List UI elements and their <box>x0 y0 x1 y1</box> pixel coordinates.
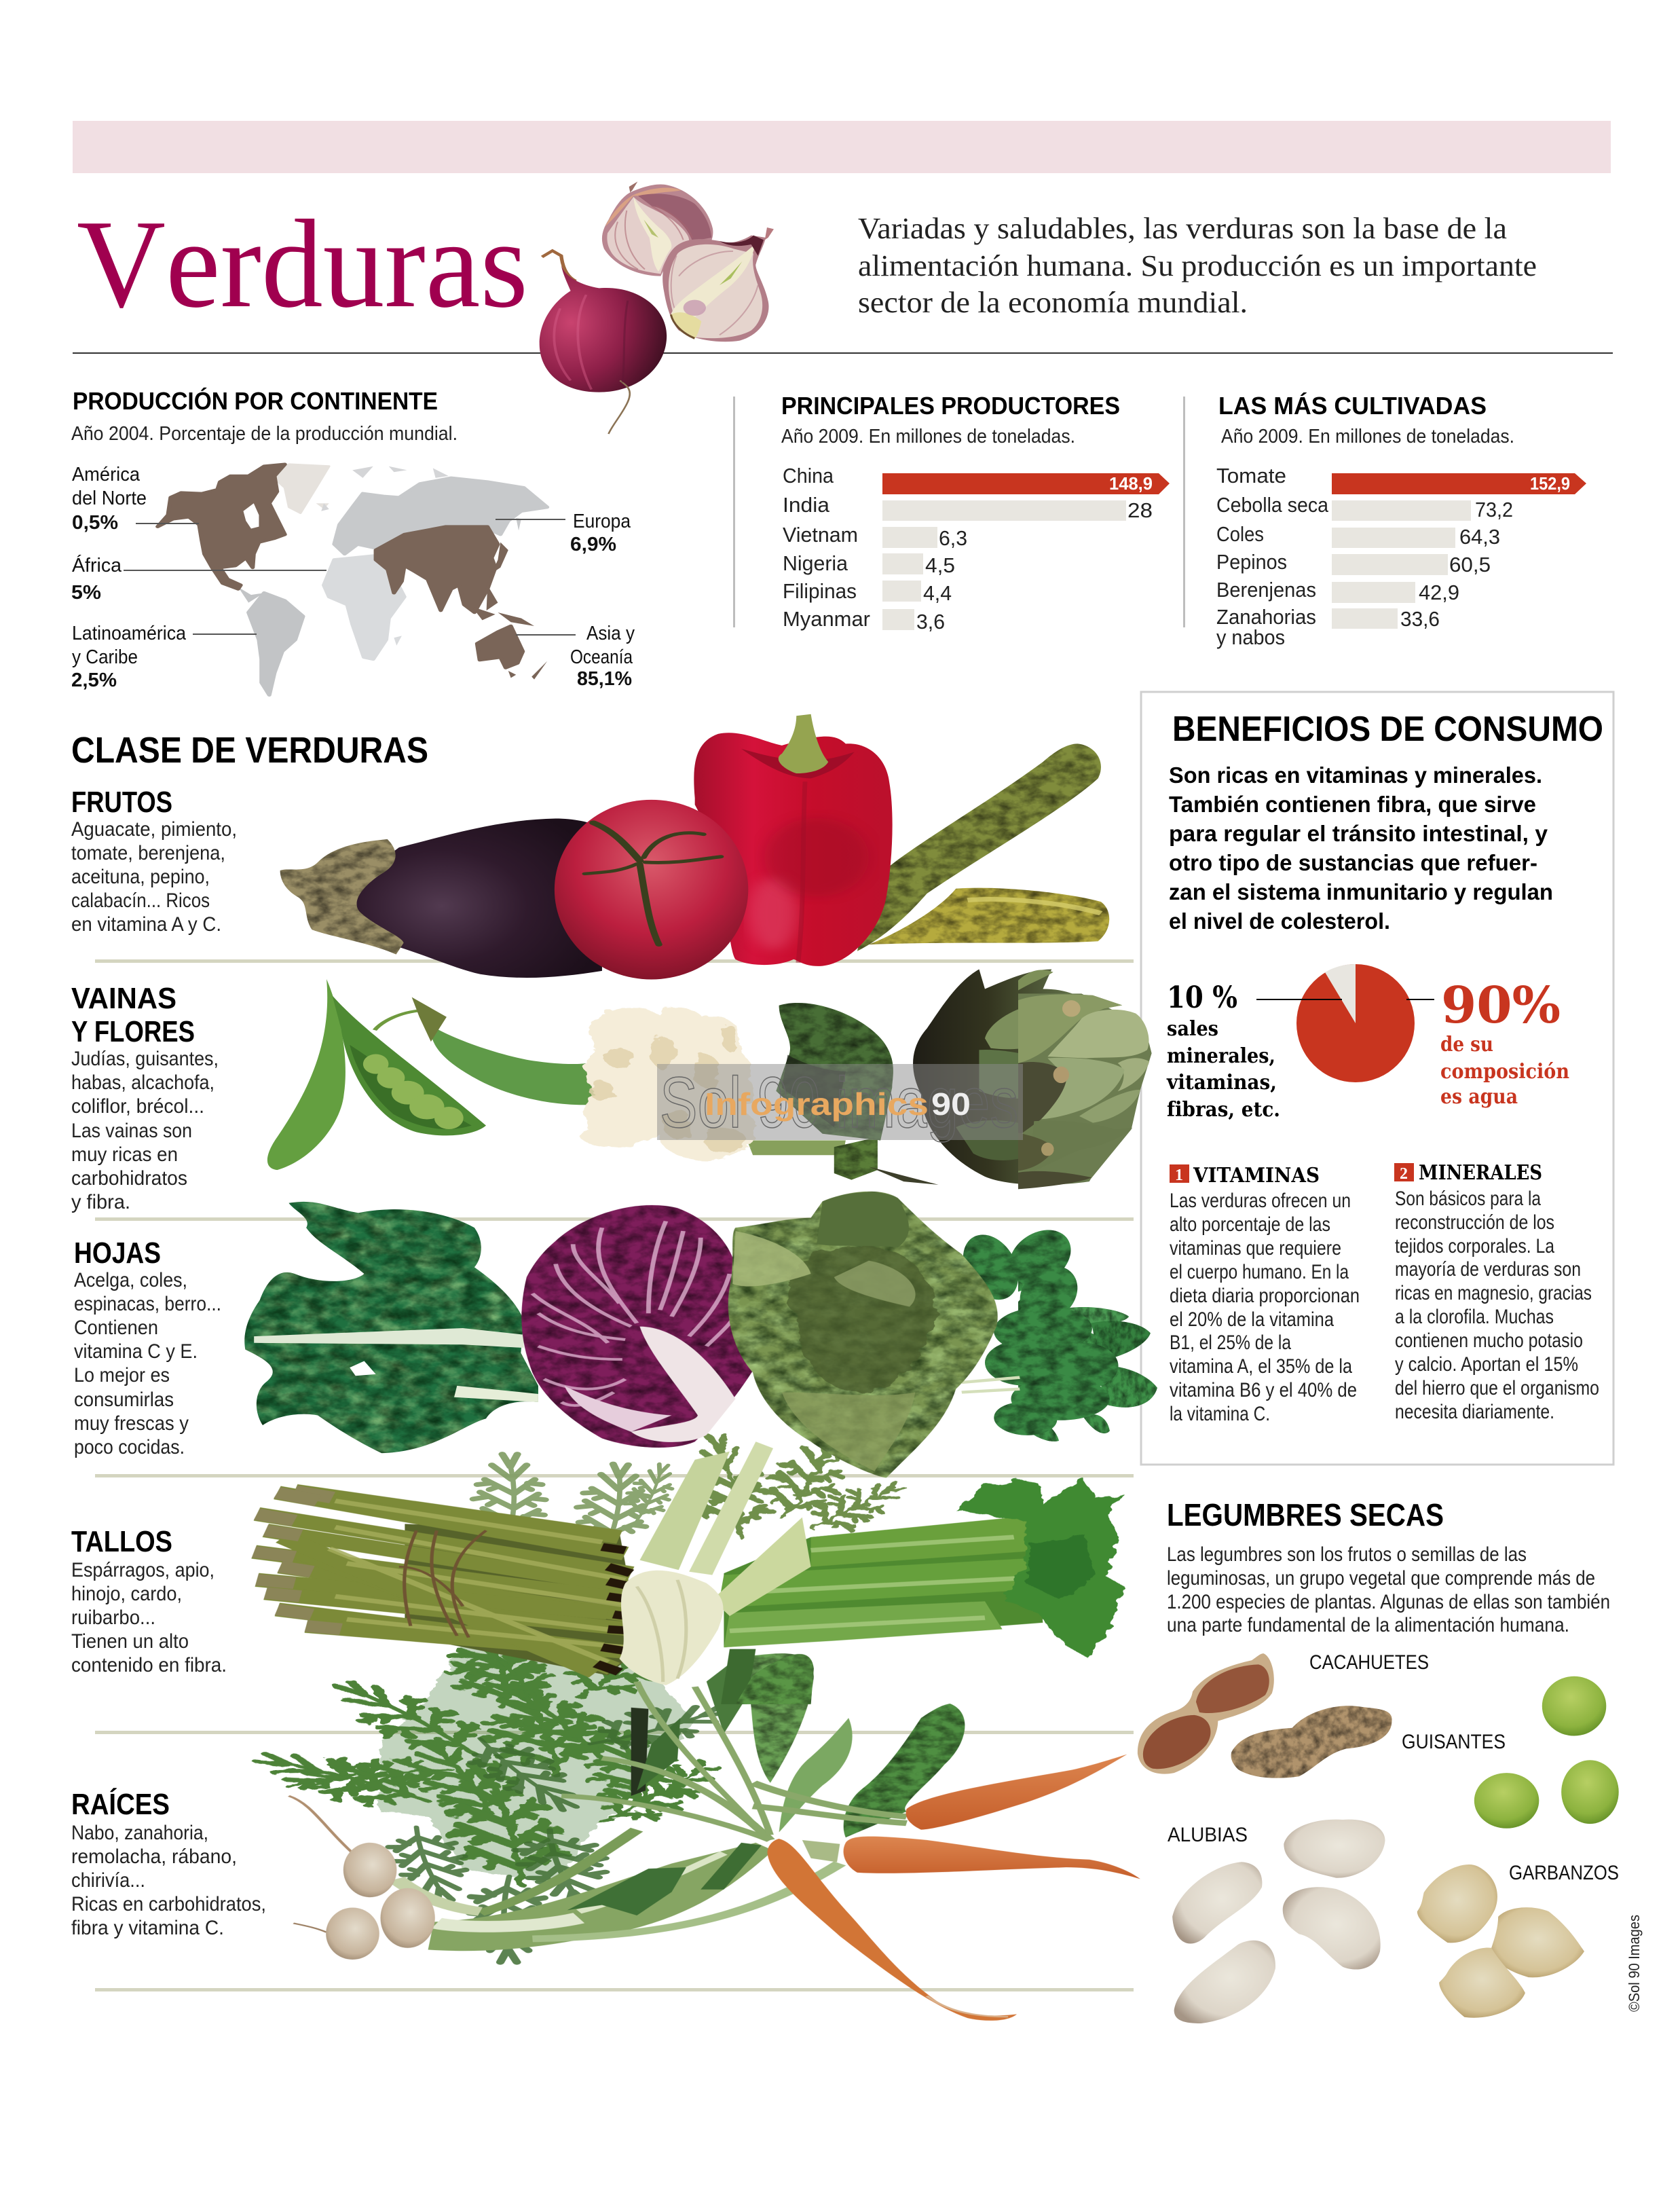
map labels: 2,5% <box>71 669 117 691</box>
text block: raíces: remolacha, rábano, <box>71 1845 237 1868</box>
text block: minerales: tejidos corporales. La <box>1395 1235 1554 1257</box>
map labels: África <box>72 554 122 576</box>
bar chart: 64,3 <box>1459 525 1500 549</box>
panel: producción por continente <box>71 386 635 695</box>
bar chart: Zanahorias <box>1216 605 1316 629</box>
intro text: alimentación humana. Su producción es un importante <box>858 249 1537 282</box>
map labels: Oceanía <box>570 646 633 668</box>
illustration: frutos (eggplant, tomato, pepper, cucumbers) <box>280 714 1109 979</box>
text block: frutos: calabacín... Ricos <box>71 889 210 912</box>
bar chart: Coles <box>1216 522 1264 546</box>
text block: raíces <box>71 1787 266 1939</box>
illustration: raíces (greens, carrots, turnips) <box>241 1620 1140 2021</box>
bar chart: 3,6 <box>916 610 945 633</box>
text block: raíces: fibra y vitamina C. <box>71 1917 224 1939</box>
map labels: y Caribe <box>72 646 138 668</box>
intro text: para regular el tránsito intestinal, y <box>1169 821 1548 846</box>
bar chart: Nigeria <box>783 551 848 575</box>
text block: vainas y flores <box>71 982 219 1213</box>
text block: raíces: RAÍCES <box>71 1787 170 1821</box>
callout: 10 %: fibras, etc. <box>1167 1098 1280 1122</box>
intro text <box>1169 763 1553 934</box>
panel: las más cultivadas <box>1216 392 1586 649</box>
map labels: Asia y <box>586 623 635 644</box>
text block: tallos: contenido en fibra. <box>71 1654 227 1676</box>
bar chart: Filipinas <box>783 579 857 603</box>
intro text: el nivel de colesterol. <box>1169 908 1390 934</box>
text block: Las legumbres son los frutos o semillas de las <box>1167 1543 1527 1566</box>
text block: vainas y flores: Y FLORES <box>71 1015 195 1048</box>
text block: frutos: aceituna, pepino, <box>71 866 210 888</box>
text block: vitaminas: vitaminas que requiere <box>1170 1237 1341 1260</box>
legume labels: GARBANZOS <box>1509 1862 1619 1884</box>
intro text: También contienen fibra, que sirve <box>1169 792 1536 817</box>
text block: vitaminas: dieta diaria proporcionan <box>1170 1285 1360 1307</box>
bar chart: India <box>783 493 830 517</box>
callout: 90%: composición <box>1440 1060 1569 1084</box>
text block: minerales: necesita diariamente. <box>1395 1401 1554 1423</box>
map labels: 0,5% <box>72 512 118 534</box>
illustration: tallos (carrot tops, asparagus, celery, fennel) <box>254 1434 1124 1704</box>
intro text: otro tipo de sustancias que refuer- <box>1169 850 1537 875</box>
text block: hojas: poco cocidas. <box>74 1436 185 1458</box>
panel: beneficios de consumo <box>1166 710 1603 1425</box>
text block: minerales: del hierro que el organismo <box>1395 1377 1599 1399</box>
heading: PRINCIPALES PRODUCTORES <box>781 392 1120 420</box>
callout: 10 % <box>1166 980 1280 1122</box>
illustration: legumes <box>1138 1653 1619 2023</box>
text block: hojas: Lo mejor es <box>74 1364 170 1386</box>
bar chart: 60,5 <box>1449 553 1491 576</box>
bar chart: 152,9 <box>1530 473 1570 494</box>
subheading: Año 2004. Porcentaje de la producción mundial. <box>71 423 458 445</box>
text block: vainas y flores: coliflor, brécol... <box>71 1095 204 1118</box>
intro text: Variadas y saludables, las verduras son la base de la <box>858 212 1507 245</box>
bar chart: Pepinos <box>1216 550 1287 574</box>
text block: minerales: Son básicos para la <box>1395 1188 1541 1210</box>
text block <box>1167 1543 1610 1636</box>
text block: frutos: en vitamina A y C. <box>71 913 221 936</box>
legume labels <box>1168 1651 1619 1884</box>
bar chart: 28 <box>1127 498 1153 522</box>
world map <box>157 464 547 695</box>
callout: 10 %: vitaminas, <box>1166 1071 1277 1095</box>
bar chart <box>783 464 1170 633</box>
map labels <box>71 464 635 691</box>
text block: vainas y flores: VAINAS <box>71 982 176 1015</box>
text block: hojas: HOJAS <box>74 1236 161 1270</box>
bar chart: 33,6 <box>1400 607 1440 631</box>
text block: frutos: FRUTOS <box>71 786 172 819</box>
map labels: 6,9% <box>570 534 616 555</box>
map labels: 5% <box>71 582 101 604</box>
text block: frutos: tomate, berenjena, <box>71 842 225 864</box>
text block: vitaminas: vitamina B6 y el 40% de <box>1170 1379 1357 1401</box>
bar chart: Tomate <box>1216 464 1286 488</box>
intro text: sector de la economía mundial. <box>858 286 1248 319</box>
credit: ©Sol 90 Images <box>1626 1915 1643 2012</box>
text block: vainas y flores: Judías, guisantes, <box>71 1048 219 1070</box>
icon: peas <box>1474 1676 1619 1829</box>
icon: red onions <box>540 181 774 434</box>
text block: frutos <box>71 786 237 936</box>
text block: vitaminas <box>1170 1164 1360 1425</box>
text block: leguminosas, un grupo vegetal que comprende más de <box>1167 1567 1595 1590</box>
text block: vitaminas: alto porcentaje de las <box>1170 1213 1330 1236</box>
intro text <box>858 212 1537 319</box>
text block: vainas y flores: muy ricas en <box>71 1143 178 1166</box>
heading: LEGUMBRES SECAS <box>1167 1497 1444 1532</box>
watermark: Sol 90 images <box>660 1063 1018 1143</box>
text block: hojas: Contienen <box>74 1317 158 1339</box>
illustration: hojas (chard, radicchio, lettuce, spinach) <box>244 1192 1157 1478</box>
text block: tallos: Tienen un alto <box>71 1630 189 1653</box>
text block: tallos: hinojo, cardo, <box>71 1583 182 1605</box>
text block: vitaminas: el 20% de la vitamina <box>1170 1308 1334 1331</box>
watermark: 90 <box>931 1086 971 1122</box>
text block: vitaminas: vitamina A, el 35% de la <box>1170 1355 1352 1378</box>
text block: hojas: espinacas, berro... <box>74 1293 221 1315</box>
text block: raíces: Nabo, zanahoria, <box>71 1822 208 1844</box>
text block: vainas y flores: Las vainas son <box>71 1120 192 1142</box>
subheading: Año 2009. En millones de toneladas. <box>1221 426 1514 447</box>
bar chart: 148,9 <box>1109 473 1153 494</box>
text block: minerales: ricas en magnesio, gracias <box>1395 1282 1592 1304</box>
bar chart: 73,2 <box>1475 498 1513 521</box>
panel: principales productores <box>781 392 1170 633</box>
callout: 10 %: minerales, <box>1167 1044 1275 1068</box>
text block: 1.200 especies de plantas. Algunas de ellas son también <box>1167 1591 1610 1613</box>
text block: vitaminas: la vitamina C. <box>1170 1403 1270 1425</box>
section rules <box>95 959 1134 1991</box>
map labels: América <box>72 464 141 485</box>
text block: raíces: Ricas en carbohidratos, <box>71 1893 266 1915</box>
text block: tallos: ruibarbo... <box>71 1606 155 1629</box>
text block: tallos: Espárragos, apio, <box>71 1559 214 1581</box>
text block: minerales: a la clorofila. Muchas <box>1395 1306 1554 1328</box>
panel frame: beneficios de consumo <box>1141 692 1613 1465</box>
text block: minerales: contienen mucho potasio <box>1395 1329 1583 1352</box>
text block: hojas: muy frescas y <box>74 1412 189 1435</box>
text block: vainas y flores: carbohidratos <box>71 1167 187 1190</box>
icon: peanuts <box>1138 1653 1392 1778</box>
text block: minerales: 2 <box>1400 1165 1408 1183</box>
bar chart: 42,9 <box>1419 581 1459 604</box>
callout: 90%: es agua <box>1440 1085 1518 1109</box>
text block: hojas: consumirlas <box>74 1389 174 1411</box>
text block: raíces: chirivía... <box>71 1869 145 1892</box>
map labels: del Norte <box>72 488 147 509</box>
heading: PRODUCCIÓN POR CONTINENTE <box>73 386 438 415</box>
text block: frutos: Aguacate, pimiento, <box>71 818 237 841</box>
illustration: vainas y flores (peas, cauliflower, broccoli, artichoke) <box>267 969 1152 1189</box>
text block: minerales: MINERALES <box>1419 1161 1542 1185</box>
text block: hojas <box>74 1236 221 1458</box>
title: Verduras <box>77 194 528 334</box>
icon: beans <box>1172 1820 1385 2023</box>
bar chart: Cebolla seca <box>1216 493 1329 517</box>
text block: hojas: Acelga, coles, <box>74 1269 187 1291</box>
text block: tallos: TALLOS <box>71 1525 172 1558</box>
subheading: Año 2009. En millones de toneladas. <box>781 426 1075 447</box>
watermark: Infographics <box>705 1086 929 1122</box>
callout: 90% <box>1440 976 1569 1109</box>
map leader lines <box>124 519 576 635</box>
text block: vainas y flores: habas, alcachofa, <box>71 1071 214 1094</box>
text block: vitaminas: Las verduras ofrecen un <box>1170 1190 1351 1212</box>
callout: 10 %: sales <box>1167 1017 1218 1041</box>
legume labels: CACAHUETES <box>1309 1651 1429 1674</box>
callout: 90%: 90% <box>1441 976 1561 1035</box>
intro text: zan el sistema inmunitario y regulan <box>1169 879 1553 904</box>
map labels: 85,1% <box>577 668 632 690</box>
bar chart <box>1216 464 1586 649</box>
bar chart: Berenjenas <box>1216 578 1316 602</box>
text block: vitaminas: 1 <box>1175 1167 1183 1184</box>
bar chart: y nabos <box>1216 625 1285 649</box>
legume labels: ALUBIAS <box>1168 1824 1248 1846</box>
text block: vitaminas: VITAMINAS <box>1193 1164 1320 1188</box>
pie chart <box>1256 964 1434 1082</box>
heading: LAS MÁS CULTIVADAS <box>1218 392 1487 420</box>
callout: 90%: de su <box>1440 1033 1493 1057</box>
bar chart: China <box>783 464 834 488</box>
callout: 10 %: 10 % <box>1167 980 1237 1015</box>
bar chart: 4,4 <box>923 581 952 605</box>
text block: minerales: reconstrucción de los <box>1395 1211 1554 1234</box>
bar chart: Vietnam <box>783 523 858 547</box>
panel: legumbres secas <box>1138 1497 1619 2023</box>
text block: minerales: y calcio. Aportan el 15% <box>1395 1353 1578 1376</box>
map labels: Europa <box>573 511 631 532</box>
text block: una parte fundamental de la alimentación humana. <box>1167 1614 1569 1636</box>
icon: chickpeas <box>1417 1865 1584 2018</box>
text block: vitaminas: B1, el 25% de la <box>1170 1331 1291 1354</box>
intro text: Son ricas en vitaminas y minerales. <box>1169 763 1542 788</box>
text block: tallos <box>71 1525 227 1676</box>
text block: hojas: vitamina C y E. <box>74 1340 198 1363</box>
text block: vainas y flores: y fibra. <box>71 1191 130 1213</box>
map labels: Latinoamérica <box>72 623 187 644</box>
bar chart: 6,3 <box>939 526 967 550</box>
header band <box>73 121 1611 173</box>
heading: BENEFICIOS DE CONSUMO <box>1172 710 1603 749</box>
heading: clase de verduras: CLASE DE VERDURAS <box>71 730 428 771</box>
legume labels: GUISANTES <box>1402 1731 1506 1753</box>
text block: minerales: mayoría de verduras son <box>1395 1258 1581 1281</box>
bar chart: 4,5 <box>925 553 955 577</box>
text block: vitaminas: el cuerpo humano. En la <box>1170 1261 1349 1283</box>
text block: minerales <box>1394 1161 1599 1423</box>
bar chart: Myanmar <box>783 607 870 631</box>
